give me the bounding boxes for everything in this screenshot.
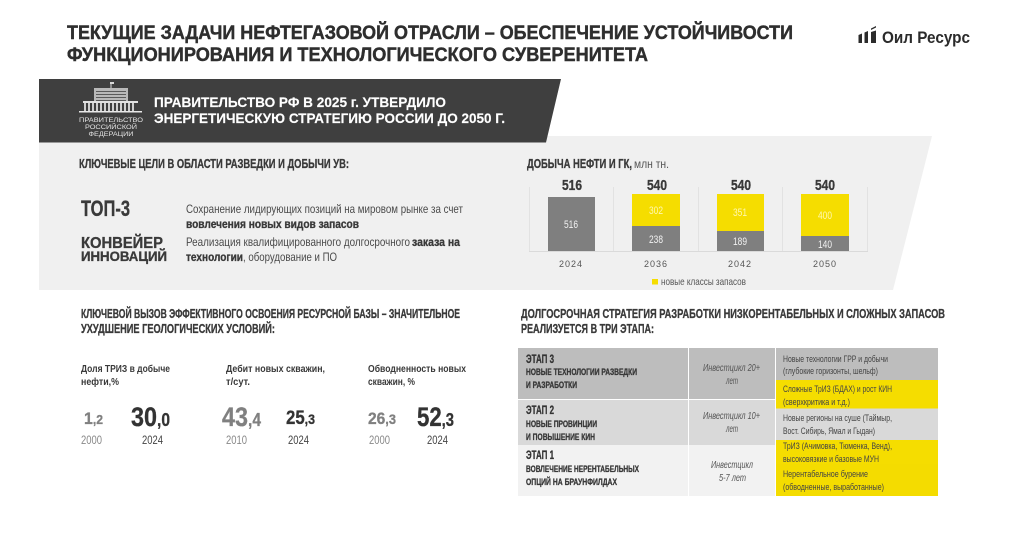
banner headline bbox=[154, 94, 505, 126]
bar chart: oil and condensate production: 540 bbox=[731, 177, 751, 194]
column: directions: Нерентабельное бурение bbox=[783, 469, 868, 480]
column: directions: Вост. Сибирь, Ямал и Гыдан) bbox=[783, 426, 875, 437]
bar chart: oil and condensate production: 189 bbox=[733, 236, 747, 248]
stage 3 row bbox=[518, 348, 775, 399]
stage 2 row: ЭТАП 2 bbox=[526, 405, 554, 417]
bar chart: oil and condensate production: 540 bbox=[815, 177, 835, 194]
stage 1 row bbox=[518, 445, 775, 496]
metric: share of hard-to-recover reserves: нефти,% bbox=[81, 376, 120, 388]
bar chart: oil and condensate production: 540 bbox=[647, 177, 667, 194]
column: directions: (сверхкритика и т.д.) bbox=[783, 397, 850, 408]
bar chart: oil and condensate production: 2042 bbox=[728, 259, 752, 269]
chart heading: ДОБЫЧА НЕФТИ И ГК, bbox=[527, 156, 632, 171]
metric: new well flow rate: т/сут. bbox=[226, 376, 250, 388]
metric: new well flow rate: Дебит новых скважин, bbox=[226, 363, 325, 375]
stage 2 row: НОВЫЕ ПРОВИНЦИИ bbox=[526, 419, 597, 429]
goal text: top-3: вовлечения новых видов запасов bbox=[186, 217, 359, 231]
icon: government house emblem: ПРАВИТЕЛЬСТВО bbox=[79, 117, 143, 124]
metric: share of hard-to-recover reserves: 1,2 bbox=[84, 409, 103, 428]
metric: water cut of new wells: Обводненность новых bbox=[368, 363, 466, 375]
heading: key goals: КЛЮЧЕВЫЕ ЦЕЛИ В ОБЛАСТИ РАЗВЕДКИ И ДОБЫЧИ УВ: bbox=[79, 156, 349, 171]
metric: new well flow rate: 2010 bbox=[226, 435, 247, 447]
heading: key challenge: КЛЮЧЕВОЙ ВЫЗОВ ЭФФЕКТИВНОГО ОСВОЕНИЯ РЕСУРСНОЙ БАЗЫ – ЗНАЧИТЕЛЬНОЕ bbox=[81, 306, 460, 321]
title: ТЕКУЩИЕ ЗАДАЧИ НЕФТЕГАЗОВОЙ ОТРАСЛИ – ОБЕСПЕЧЕНИЕ УСТОЙЧИВОСТИ bbox=[67, 20, 793, 44]
column: directions: (глубокие горизонты, шельф) bbox=[783, 366, 878, 377]
column: directions bbox=[776, 348, 938, 496]
metric: share of hard-to-recover reserves: Доля ТРИЗ в добыче bbox=[81, 363, 170, 375]
goal label: innovation conveyor: ИННОВАЦИЙ bbox=[81, 247, 167, 264]
goal label: innovation conveyor bbox=[81, 233, 167, 264]
bar chart: oil and condensate production: 400 bbox=[818, 210, 832, 222]
stage 1 row: ОПЦИЙ НА БРАУНФИЛДАХ bbox=[526, 476, 617, 487]
bar chart: oil and condensate production: 238 bbox=[649, 234, 663, 246]
stage 2 row: лет bbox=[725, 424, 738, 435]
heading: key challenge bbox=[81, 306, 460, 336]
goal text: top-3: Сохранение лидирующих позиций на мировом рынке за счет bbox=[186, 202, 463, 216]
stage 1 row: Инвестцикл bbox=[711, 460, 753, 471]
icon: government house emblem bbox=[79, 82, 143, 138]
icon: government house emblem: ФЕДЕРАЦИИ bbox=[88, 131, 134, 138]
goal label: innovation conveyor: КОНВЕЙЕР bbox=[81, 233, 163, 252]
metric: water cut of new wells: 52,3 bbox=[417, 402, 454, 432]
title bbox=[67, 20, 793, 66]
metric: water cut of new wells: скважин, % bbox=[368, 376, 416, 388]
column: directions: ТрИЗ (Ачимовка, Тюменка, Венд), bbox=[783, 441, 892, 452]
banner headline: ЭНЕРГЕТИЧЕСКУЮ СТРАТЕГИЮ РОССИИ ДО 2050 Г. bbox=[154, 110, 505, 126]
metric: new well flow rate bbox=[222, 363, 325, 447]
metric: water cut of new wells bbox=[368, 363, 466, 447]
metric: new well flow rate: 2024 bbox=[288, 435, 309, 447]
chart legend: новые классы запасов bbox=[661, 276, 746, 288]
logo: Оил Ресурс: Оил Ресурс bbox=[882, 29, 970, 47]
metric: share of hard-to-recover reserves: 30,0 bbox=[131, 402, 170, 432]
stage 2 row: Инвестцикл 10+ bbox=[703, 411, 760, 422]
column: directions: высоковязкие и базовые МУН bbox=[783, 454, 879, 465]
metric: new well flow rate: 25,3 bbox=[286, 408, 315, 429]
logo: Оил Ресурс bbox=[858, 26, 970, 47]
panel: light background bbox=[39, 136, 932, 290]
metric: share of hard-to-recover reserves: 2024 bbox=[142, 435, 163, 447]
metric: share of hard-to-recover reserves bbox=[81, 363, 170, 447]
bar chart: oil and condensate production: 516 bbox=[564, 219, 578, 231]
bar chart: oil and condensate production: 140 bbox=[818, 239, 832, 251]
metric: water cut of new wells: 26,3 bbox=[368, 409, 396, 428]
chart heading: млн тн. bbox=[634, 157, 669, 171]
bar chart: oil and condensate production: 302 bbox=[649, 205, 663, 217]
metric: water cut of new wells: 2000 bbox=[369, 435, 390, 447]
column: directions: (обводненные, выработанные) bbox=[783, 482, 884, 493]
goal text: innovation conveyor: заказа на bbox=[412, 235, 460, 249]
bar chart: oil and condensate production: 2024 bbox=[559, 259, 583, 269]
table: development stages bbox=[518, 348, 938, 496]
panel: dark banner bbox=[39, 79, 561, 142]
column: directions: Новые технологии ГРР и добычи bbox=[783, 354, 888, 365]
bar chart: oil and condensate production: 516 bbox=[562, 177, 582, 194]
stage 3 row: Инвестцикл 20+ bbox=[703, 363, 760, 374]
stage 3 row: лет bbox=[725, 376, 738, 387]
stage 2 row: И ПОВЫШЕНИЕ КИН bbox=[526, 432, 595, 442]
goal text: top-3 bbox=[186, 202, 463, 231]
title: ФУНКЦИОНИРОВАНИЯ И ТЕХНОЛОГИЧЕСКОГО СУВЕРЕНИТЕТА bbox=[67, 44, 648, 66]
stage 2 row bbox=[518, 400, 775, 445]
bar chart: oil and condensate production: 2036 bbox=[644, 259, 668, 269]
goal label: top-3: ТОП-3 bbox=[81, 196, 130, 221]
bar chart: oil and condensate production: 2050 bbox=[813, 259, 837, 269]
heading: long-term strategy bbox=[521, 306, 945, 336]
metric: new well flow rate: 43,4 bbox=[222, 402, 261, 432]
stage 1 row: ВОВЛЕЧЕНИЕ НЕРЕНТАБЕЛЬНЫХ bbox=[526, 464, 639, 474]
heading: key challenge: УХУДШЕНИЕ ГЕОЛОГИЧЕСКИХ УСЛОВИЙ: bbox=[81, 321, 275, 336]
stage 3 row: ЭТАП 3 bbox=[526, 354, 554, 366]
column: directions: Новые регионы на суше (Таймыр, bbox=[783, 413, 892, 424]
bar chart: oil and condensate production: 351 bbox=[733, 207, 747, 219]
metric: water cut of new wells: 2024 bbox=[427, 435, 448, 447]
goal text: innovation conveyor bbox=[186, 235, 460, 264]
stage 3 row: И РАЗРАБОТКИ bbox=[526, 380, 577, 390]
stage 3 row: НОВЫЕ ТЕХНОЛОГИИ РАЗВЕДКИ bbox=[526, 367, 637, 377]
goal text: innovation conveyor: технологии bbox=[186, 250, 243, 264]
goal text: innovation conveyor: Реализация квалифицированного долгосрочного bbox=[186, 235, 410, 249]
banner headline: ПРАВИТЕЛЬСТВО РФ В 2025 г. УТВЕРДИЛО bbox=[154, 94, 446, 110]
metric: share of hard-to-recover reserves: 2000 bbox=[81, 435, 102, 447]
icon: government house emblem: РОССИЙСКОЙ bbox=[85, 122, 137, 131]
column: directions: Сложные ТрИЗ (БДАХ) и рост КИН bbox=[783, 384, 892, 395]
bar chart: oil and condensate production bbox=[529, 177, 868, 269]
stage 1 row: ЭТАП 1 bbox=[526, 450, 554, 462]
stage 1 row: 5-7 лет bbox=[719, 473, 746, 484]
heading: long-term strategy: РЕАЛИЗУЕТСЯ В ТРИ ЭТАПА: bbox=[521, 321, 654, 336]
goal text: innovation conveyor: , оборудование и ПО bbox=[243, 250, 337, 264]
